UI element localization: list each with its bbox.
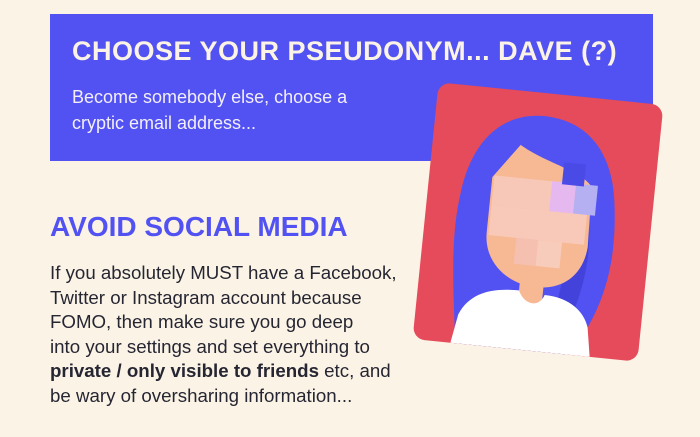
text: social media advice: [50, 262, 397, 406]
text: social media advice: FOMO, then make sure you go deep: [50, 311, 353, 332]
heading: choose your pseudonym: CHOOSE YOUR PSEUDONYM... DAVE (?): [72, 36, 617, 66]
text: social media advice: private / only visible to friends etc, and: [50, 360, 391, 381]
text: social media advice: Twitter or Instagram account because: [50, 287, 362, 308]
text: pseudonym description: Become somebody else, choose a: [72, 87, 347, 107]
text: social media advice: If you absolutely MUST have a Facebook,: [50, 262, 397, 283]
illustration: pixelated avatar card: [414, 83, 662, 361]
text: social media advice: be wary of oversharing information...: [50, 385, 352, 406]
text: pseudonym description: [72, 87, 348, 133]
text: social media advice: into your settings and set everything to: [50, 336, 370, 357]
heading: avoid social media: AVOID SOCIAL MEDIA: [50, 211, 348, 242]
panel: pseudonym: [50, 14, 653, 161]
text: pseudonym description: cryptic email address...: [72, 113, 256, 133]
